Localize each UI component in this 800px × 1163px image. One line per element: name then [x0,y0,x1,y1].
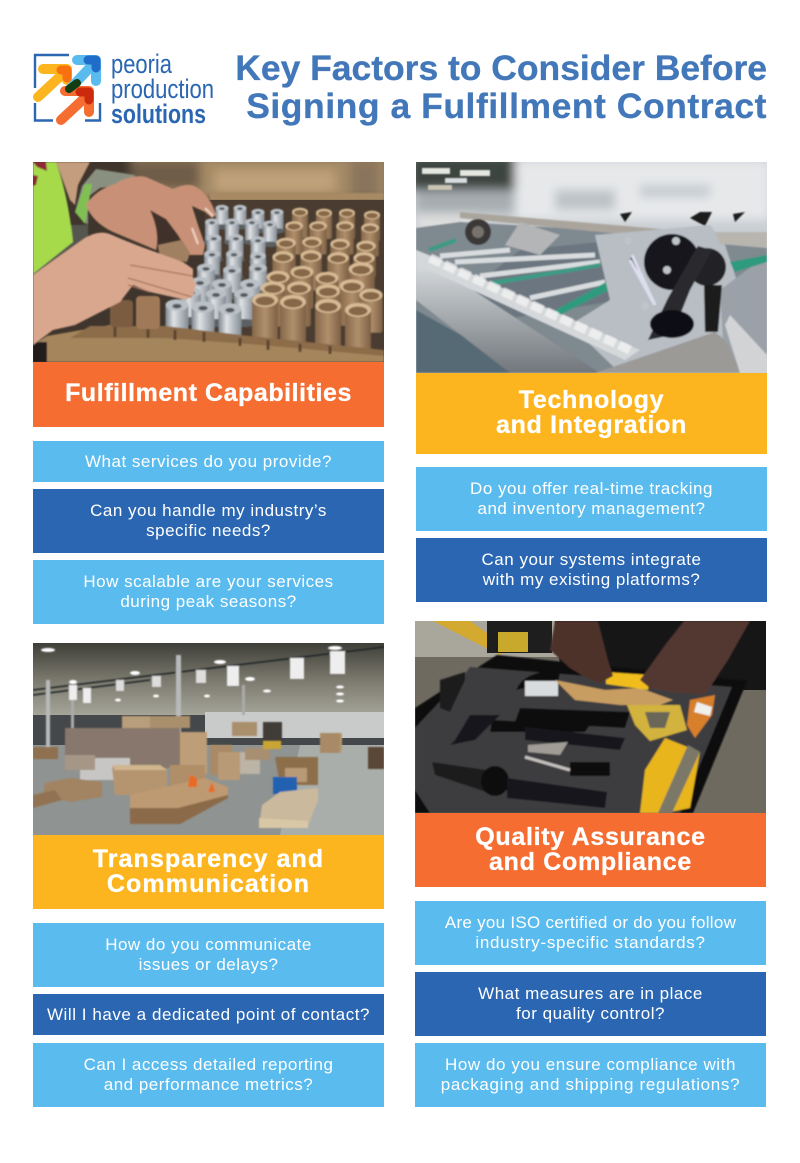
question: What measures are in place [478,984,703,1003]
question: How do you communicate [105,935,312,954]
question: How do you ensure compliance with [445,1055,736,1074]
question [33,1043,384,1107]
question: industry-specific standards? [475,933,706,952]
question [33,489,384,553]
question: Are you ISO certified or do you follow [445,913,736,932]
panel: quality assurance and compliance [415,621,766,1107]
question [33,923,384,987]
question: How scalable are your services [83,572,334,591]
question: Will I have a dedicated point of contact? [47,1004,370,1024]
heading: Transparency and Communication: Communication [107,870,310,898]
photo: hands packing tool case [415,621,766,813]
question: issues or delays? [139,955,278,974]
question: and inventory management? [478,499,705,518]
panel: transparency and communication [33,643,384,1107]
logo mark [35,55,100,120]
question: packaging and shipping regulations? [441,1075,740,1094]
photo: warehouse floor [33,643,384,835]
question [33,994,384,1035]
title: Key Factors to Consider Before [235,48,767,88]
logo wordmark [111,49,214,129]
question: for quality control? [516,1004,665,1023]
logo [33,52,214,128]
question: Can your systems integrate [482,550,701,569]
heading: Technology and Integration: and Integration [496,411,687,439]
question [33,560,384,624]
photo: conveyor machinery [416,162,767,373]
question: with my existing platforms? [483,570,700,589]
question [415,901,766,965]
heading: Fulfillment Capabilities [33,362,384,427]
heading: Transparency and Communication: Transparency and [93,845,324,873]
heading: Transparency and Communication [33,835,384,909]
heading: Technology and Integration: Technology [519,386,664,414]
heading: Quality Assurance and Compliance: and Compliance [489,848,692,876]
question: and performance metrics? [104,1075,313,1094]
panel: fulfillment capabilities [33,162,384,624]
question: Do you offer real-time tracking [470,479,713,498]
heading: Quality Assurance and Compliance: Quality Assurance [475,823,706,851]
photo: hands packing spark plugs [33,162,384,362]
question: Can I access detailed reporting [84,1055,333,1074]
heading: Technology and Integration [416,373,767,454]
heading: Quality Assurance and Compliance [415,813,766,887]
question [415,972,766,1036]
question [415,1043,766,1107]
title: Signing a Fulfillment Contract [246,86,767,126]
question: specific needs? [146,521,271,540]
question: Can you handle my industry’s [90,501,327,520]
question: What services do you provide? [85,452,332,470]
title [235,48,767,126]
question: during peak seasons? [120,592,297,611]
question [33,441,384,482]
panel: technology and integration [416,162,767,602]
question [416,467,767,531]
question [416,538,767,602]
heading: Fulfillment Capabilities: Fulfillment Capabilities [65,379,352,407]
